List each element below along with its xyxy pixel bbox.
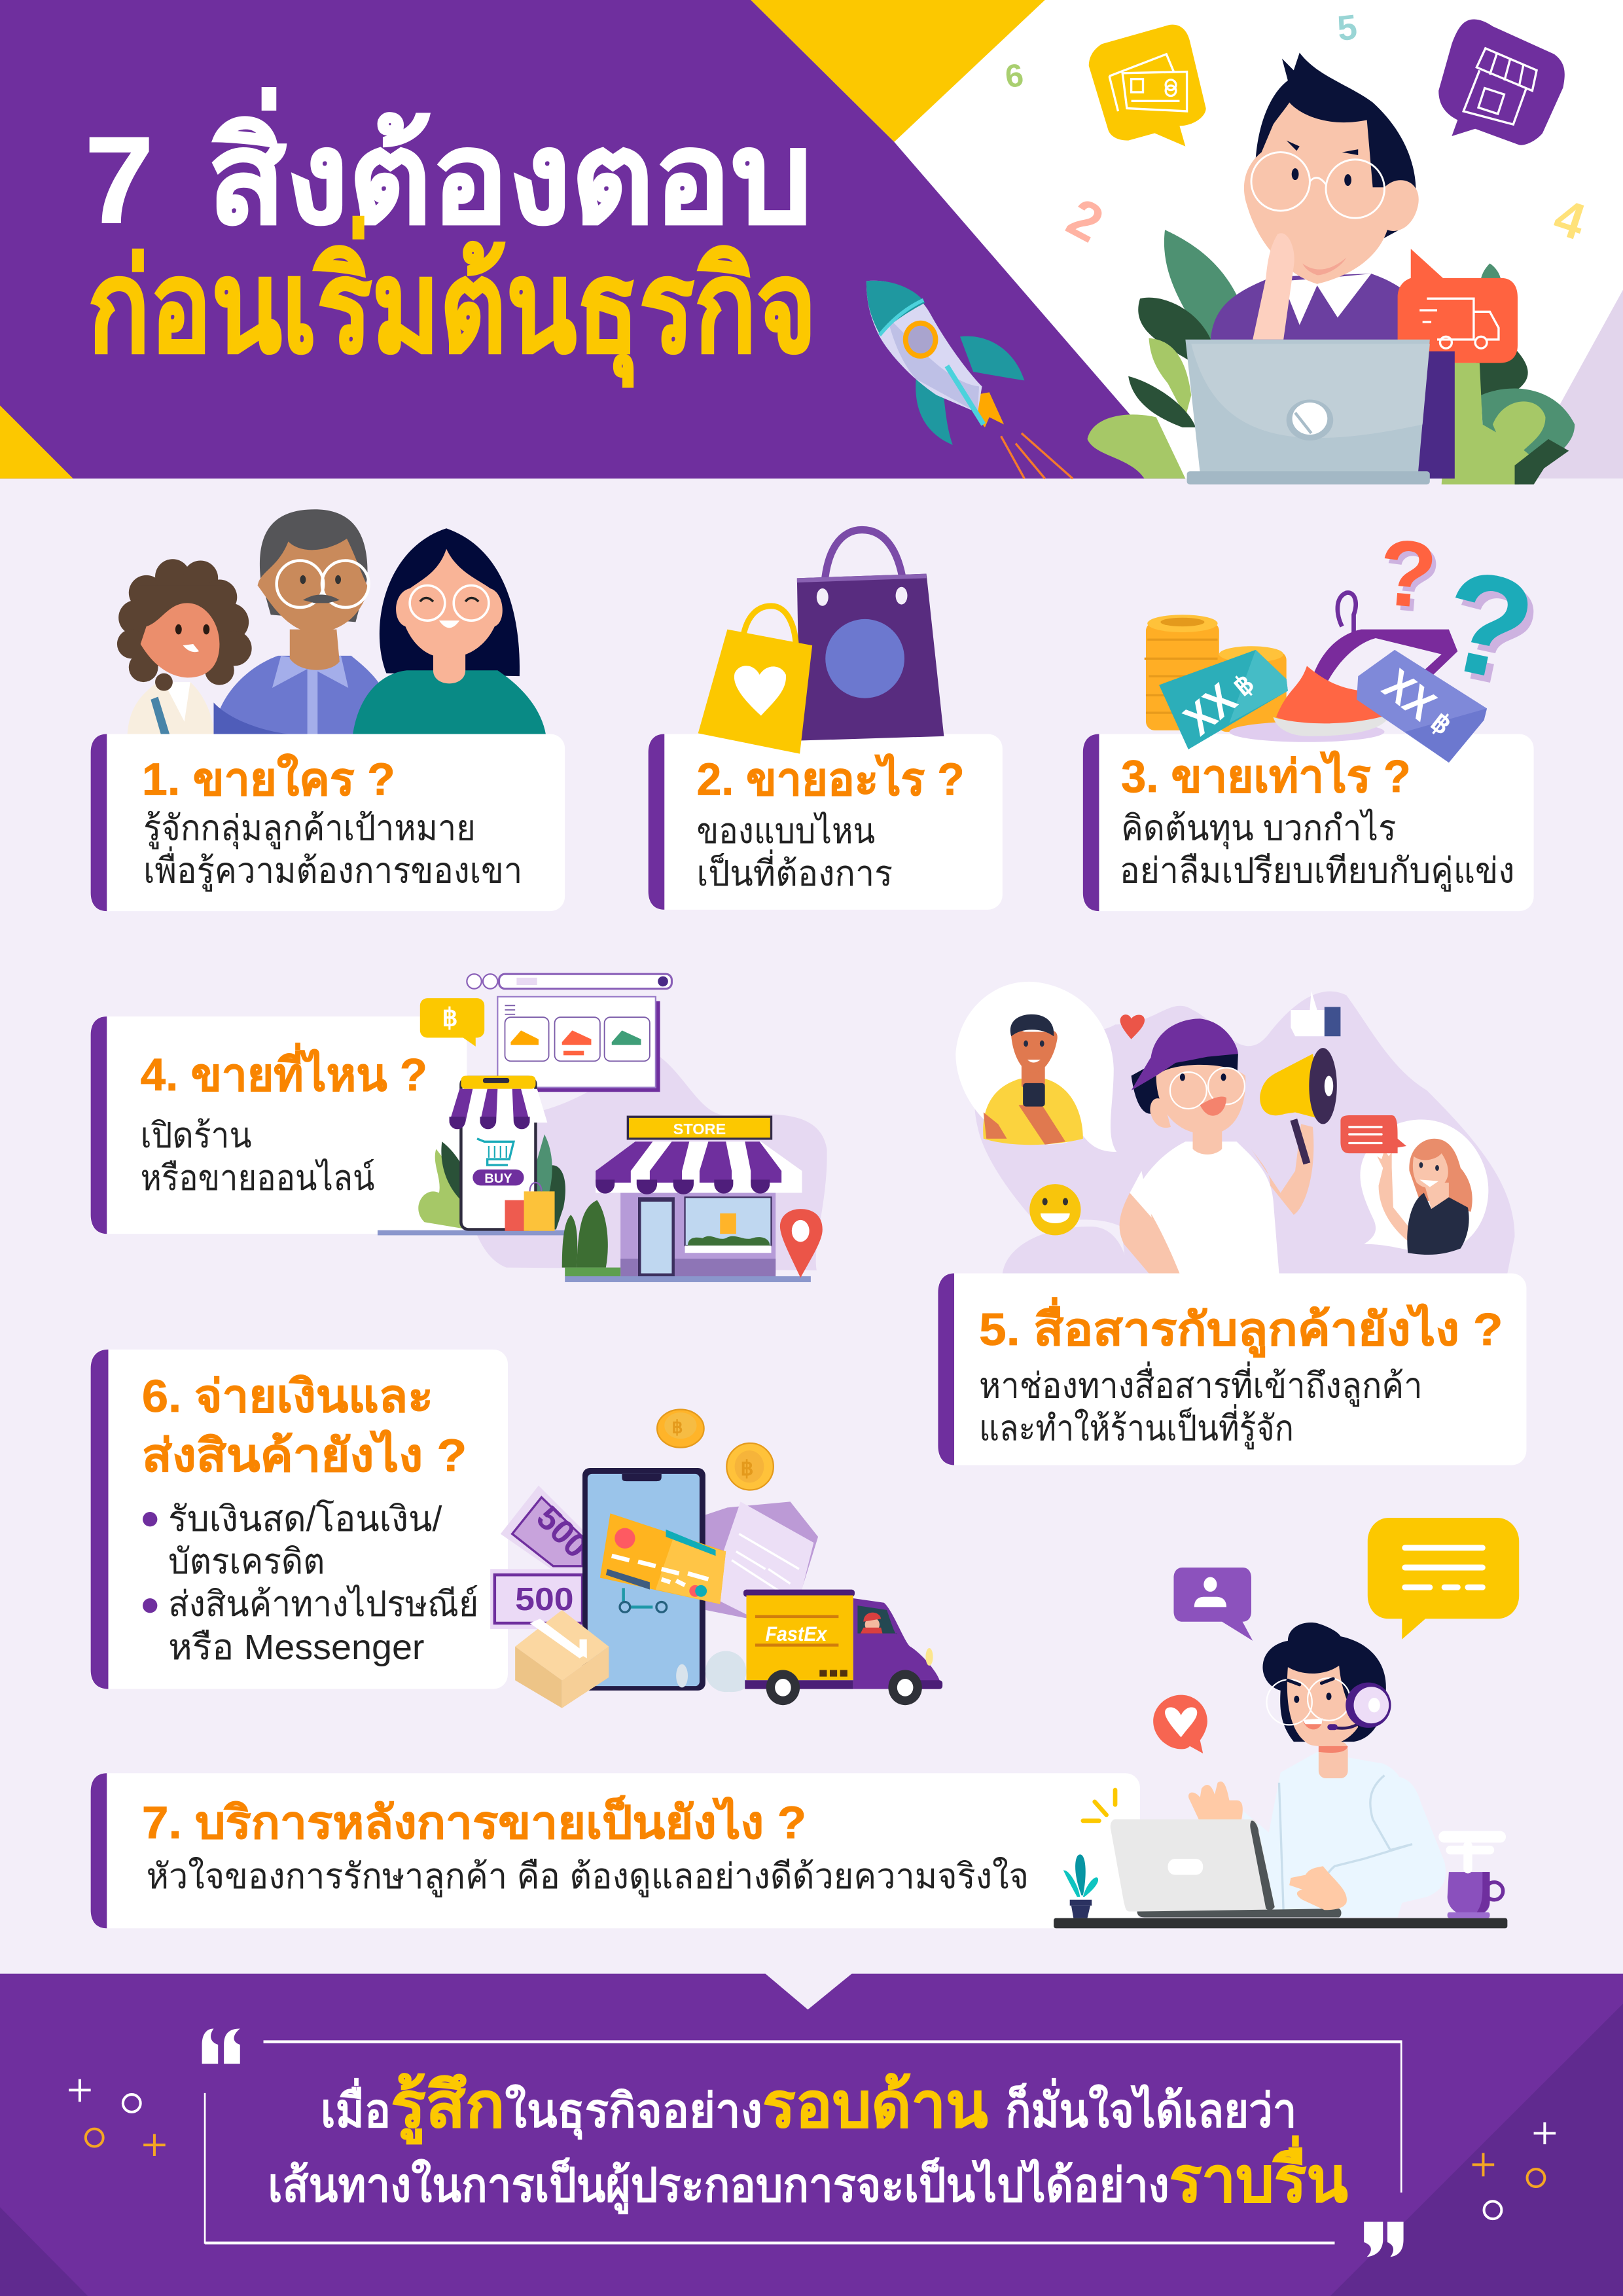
icon: heart bubble — [1153, 1695, 1207, 1753]
icon: purple profile bubble — [1173, 1568, 1253, 1641]
body text — [979, 1361, 1423, 1449]
decorative sparks left — [69, 2079, 166, 2156]
title: สิ่งต้องตอบ — [208, 88, 812, 250]
illustration: coins tags sneaker hanger: ฿ — [1425, 707, 1457, 740]
title — [85, 88, 817, 387]
body text — [143, 809, 522, 891]
icon: yellow chat bubble — [1368, 1518, 1519, 1640]
footer banner — [0, 1974, 1623, 2296]
illustration: payment and delivery: ฿ — [741, 1457, 753, 1480]
illustration: payment and delivery: 500 — [515, 1581, 574, 1617]
card panel — [91, 1773, 1140, 1928]
illustration: woman waving in bubble — [1360, 1119, 1488, 1255]
body text — [141, 1116, 374, 1198]
illustration: coins tags sneaker hanger: ? — [1428, 539, 1547, 713]
illustration: online shop and store: ฿ — [442, 1005, 458, 1032]
illustration: coins tags sneaker hanger — [1145, 520, 1553, 762]
body text: หรือขายออนไลน์ — [141, 1158, 374, 1198]
bullet list: บัตรเครดิต — [168, 1542, 325, 1581]
numbers floating: 6 — [1003, 57, 1026, 95]
heading: 2. ขายอะไร ? — [696, 753, 965, 804]
bullet list: ส่งสินค้าทางไปรษณีย์ — [168, 1584, 478, 1624]
illustration background blob — [469, 1048, 827, 1270]
illustration: payment and delivery: 500 — [529, 1498, 596, 1565]
illustration: coins tags sneaker hanger: ? — [1434, 546, 1553, 721]
icon: rocket — [866, 281, 1073, 478]
heading: 5. สื่อสารกับลูกค้ายังไง ? — [979, 1297, 1503, 1358]
decorative sparks right — [1472, 2123, 1556, 2219]
icon: potted plant — [1063, 1854, 1098, 1918]
body text: เป็นที่ต้องการ — [696, 849, 893, 893]
illustration: coins tags sneaker hanger: ? — [1378, 524, 1444, 634]
quote frame — [205, 2040, 1401, 2244]
icon: shopping bags — [698, 530, 944, 754]
quote text: ก็มั่นใจได้เลยว่า — [1005, 2077, 1296, 2137]
card 4 — [91, 974, 827, 1282]
illustration: man with phone in bubble — [955, 982, 1116, 1152]
heading: 4. ขายที่ไหน ? — [141, 1043, 427, 1100]
card 2 — [649, 530, 1003, 910]
icon: heart — [1120, 1014, 1145, 1039]
illustration: coins tags sneaker hanger: XX — [1175, 674, 1245, 745]
illustration: online shop and store: BUY — [484, 1172, 512, 1186]
numbers floating — [1003, 7, 1592, 254]
icon: opening quote mark — [202, 2028, 240, 2064]
quote text: เส้นทางในการเป็นผู้ประกอบการจะเป็นไปได้อย่าง — [268, 2157, 1169, 2214]
card 7 — [91, 1518, 1519, 1928]
body text — [1120, 808, 1515, 891]
body text: อย่าลืมเปรียบเทียบกับคู่แข่ง — [1120, 851, 1515, 891]
illustration: boy with megaphone — [1120, 1018, 1337, 1274]
body text: หาช่องทางสื่อสารที่เข้าถึงลูกค้า — [979, 1361, 1423, 1407]
illustration: laptop — [1185, 340, 1455, 484]
quote text: รู้สึก — [391, 2070, 505, 2144]
card panel — [1083, 734, 1534, 911]
body text: คิดต้นทุน บวกกำไร — [1121, 808, 1396, 850]
header banner — [0, 0, 1623, 478]
quote text: รอบด้าน — [762, 2070, 988, 2140]
illustration background blob — [974, 992, 1515, 1274]
heading: 7. บริการหลังการขายเป็นยังไง ? — [142, 1796, 806, 1848]
numbers floating: 2 — [1058, 187, 1113, 254]
heading: 6. จ่ายเงินและ — [142, 1371, 433, 1422]
body text: หัวใจของการรักษาลูกค้า คือ ต้องดูแลอย่างดีด้วยความจริงใจ — [147, 1856, 1029, 1897]
quote text: ในธุรกิจอย่าง — [505, 2083, 762, 2140]
illustration: customer service agent — [1054, 1623, 1507, 1928]
illustration: online shop and store — [378, 974, 823, 1282]
icon: smiley — [1029, 1184, 1080, 1235]
card panel — [938, 1274, 1526, 1465]
icon: sparkle lines — [1083, 1790, 1115, 1821]
illustration: online shop and store: STORE — [673, 1121, 726, 1138]
heading: ส่งสินค้ายังไง ? — [142, 1429, 467, 1480]
heading: 1. ขายใคร ? — [142, 753, 395, 804]
icon: delivery truck bubble — [1398, 249, 1518, 363]
body text: ของแบบไหน — [696, 811, 875, 851]
numbers floating: 4 — [1547, 188, 1592, 251]
icon: closing quote mark — [1364, 2222, 1404, 2257]
illustration blob small — [1003, 1227, 1130, 1274]
card panel — [91, 1350, 508, 1689]
body text: และทำให้ร้านเป็นที่รู้จัก — [979, 1403, 1294, 1449]
heading — [142, 1371, 467, 1480]
body text — [696, 811, 893, 893]
illustration: three customers — [117, 509, 546, 735]
card 5 — [938, 982, 1526, 1465]
illustration: payment and delivery: ฿ — [671, 1417, 683, 1437]
card panel — [649, 734, 1003, 910]
card 1 — [91, 509, 565, 911]
card 3 — [1083, 520, 1553, 911]
card panel — [91, 734, 565, 911]
body text: เพื่อรู้ความต้องการของเขา — [143, 846, 522, 891]
heading: 3. ขายเท่าไร ? — [1121, 750, 1411, 802]
bullet list — [143, 1499, 478, 1667]
illustration: coins tags sneaker hanger: XX — [1374, 660, 1445, 730]
body text: เปิดร้าน — [141, 1116, 252, 1155]
quote text: เมื่อ — [321, 2077, 391, 2137]
illustration: coins tags sneaker hanger: ? — [1374, 520, 1440, 629]
icon: thumbs up — [1291, 991, 1340, 1036]
bullet list: หรือ Messenger — [168, 1628, 425, 1667]
illustration: payment and delivery: FastEx — [766, 1623, 828, 1645]
icon: chat bubble red — [1340, 1115, 1406, 1153]
illustration: coins tags sneaker hanger: ฿ — [1228, 668, 1260, 702]
illustration: thinking man — [1210, 53, 1442, 344]
icon: yellow card speech bubble — [1089, 25, 1206, 147]
quote text: ราบรื่น — [1169, 2135, 1348, 2215]
icon: coffee cup — [1438, 1831, 1506, 1918]
quote text — [268, 2070, 1348, 2215]
illustration: payment and delivery — [490, 1410, 942, 1708]
card 6 — [91, 1350, 942, 1708]
title: 7 — [85, 111, 154, 249]
bullet list: รับเงินสด/โอนเงิน/ — [168, 1499, 442, 1539]
card panel — [91, 1016, 467, 1234]
plants behind man — [1088, 230, 1575, 484]
body text: รู้จักกลุ่มลูกค้าเป้าหมาย — [143, 809, 476, 850]
title: ก่อนเริ่มต้นธุรกิจ — [88, 217, 817, 387]
numbers floating: 5 — [1336, 7, 1359, 48]
icon: purple store speech bubble — [1438, 20, 1565, 145]
